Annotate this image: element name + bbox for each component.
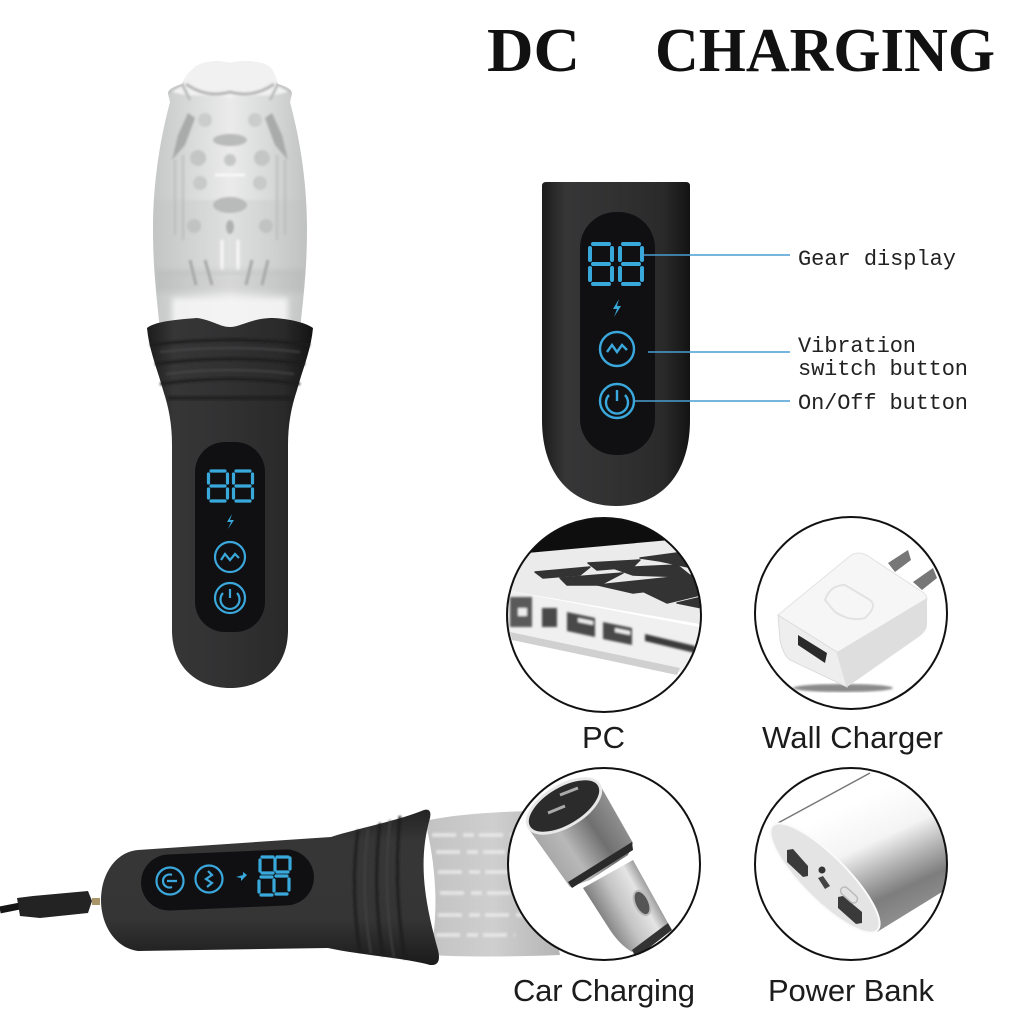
label: car charging: Car Charging xyxy=(513,973,695,1008)
label: wall charger: Wall Charger xyxy=(762,720,943,755)
title: CHARGING xyxy=(655,17,995,85)
title: DC xyxy=(487,17,580,85)
power cable xyxy=(0,891,100,918)
label: PC: PC xyxy=(582,720,625,755)
bolt icon xyxy=(227,514,234,529)
circle: wall charger xyxy=(755,517,947,755)
control panel xyxy=(195,442,265,632)
clear sleeve xyxy=(150,58,310,335)
callout: on/off button: On/Off button xyxy=(798,391,968,416)
callout: vibration switch button: switch button xyxy=(798,357,968,382)
power button xyxy=(215,583,245,613)
upright device xyxy=(147,58,313,688)
label: power bank: Power Bank xyxy=(768,973,934,1008)
shadow xyxy=(793,684,893,692)
horizontal device with cable xyxy=(0,810,560,965)
callout: vibration switch button: Vibration xyxy=(798,334,916,359)
callout: vibration switch button xyxy=(648,334,968,382)
black handle, side view xyxy=(101,810,439,965)
close-up power button xyxy=(600,384,634,418)
close-up digit display xyxy=(590,244,642,284)
close-up of handle xyxy=(542,182,690,506)
prongs xyxy=(888,550,937,590)
digit display xyxy=(208,471,252,501)
close-up bolt icon xyxy=(613,299,621,317)
circle: PC xyxy=(505,518,705,755)
callout: gear display: Gear display xyxy=(798,247,956,272)
title xyxy=(487,17,995,85)
close-up vibration button xyxy=(600,332,634,366)
black handle xyxy=(147,318,313,688)
side control panel xyxy=(140,848,315,912)
circle: car charger xyxy=(508,768,700,1008)
close-up control panel xyxy=(580,212,655,455)
clear sleeve, side view xyxy=(425,811,560,956)
circle: power bank xyxy=(755,768,955,1008)
vibration button xyxy=(215,542,245,572)
